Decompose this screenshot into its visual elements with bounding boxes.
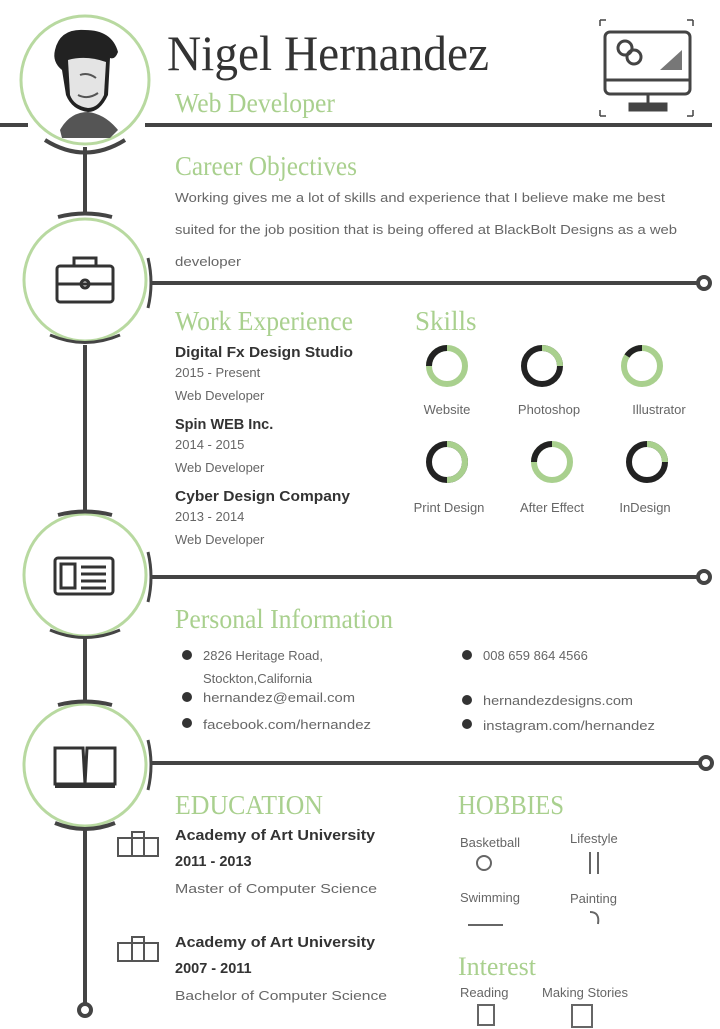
section: personal information: hernandezdesigns.com	[483, 693, 633, 708]
section: personal information: 008 659 864 4566	[483, 648, 588, 663]
section: skills: InDesign	[619, 500, 671, 515]
circle: briefcase	[24, 214, 151, 342]
section: career objectives: Career Objectives	[175, 151, 357, 181]
section: education: 2007 - 2011	[175, 961, 252, 977]
icon: id card	[55, 558, 113, 594]
section: hobbies	[458, 790, 628, 1027]
section: hobbies: Making Stories	[542, 985, 628, 1000]
section: skills	[414, 306, 686, 515]
section: education: Academy of Art University	[175, 828, 375, 844]
section: work experience: Web Developer	[175, 532, 265, 547]
section: personal information: hernandez@email.com	[203, 690, 355, 705]
section: skills: Illustrator	[632, 402, 686, 417]
section: work experience: Work Experience	[175, 306, 353, 336]
section: skills: After Effect	[520, 500, 584, 515]
section: personal information	[175, 604, 655, 733]
section: personal information: instagram.com/hernandez	[483, 718, 655, 733]
section: education: 2011 - 2013	[175, 854, 252, 870]
section: skills: Website	[424, 402, 470, 417]
icon: book	[55, 748, 115, 786]
section: career objectives: Working gives me a lot of skills and experience that I believe make me best	[175, 190, 665, 205]
section: hobbies: Swimming	[460, 890, 520, 905]
section: personal information: Personal Information	[175, 604, 393, 634]
section: hobbies: Lifestyle	[570, 831, 618, 846]
section: education: Academy of Art University	[175, 935, 375, 951]
portrait	[54, 30, 118, 138]
section: work experience: Cyber Design Company	[175, 489, 350, 505]
section: education: EDUCATION	[175, 790, 323, 820]
section: work experience: Web Developer	[175, 388, 265, 403]
circle: id card	[24, 512, 151, 638]
section: skills: Print Design	[414, 500, 484, 515]
section: hobbies: HOBBIES	[458, 790, 564, 820]
section: work experience: 2015 - Present	[175, 365, 261, 380]
section: personal information: facebook.com/hernandez	[203, 717, 371, 732]
circle: book	[24, 702, 151, 829]
section: career objectives	[175, 151, 677, 269]
section: work experience: 2013 - 2014	[175, 509, 244, 524]
section: personal information: 2826 Heritage Road,	[203, 648, 323, 663]
icon: school	[118, 832, 158, 961]
subtitle: Web Developer	[175, 88, 335, 118]
section: work experience: Web Developer	[175, 460, 265, 475]
section: education	[118, 790, 387, 1003]
section: work experience: Digital Fx Design Studio	[175, 345, 353, 361]
skill rings	[429, 348, 665, 480]
photo circle	[21, 16, 149, 152]
section: education: Bachelor of Computer Science	[175, 988, 387, 1003]
section: career objectives: developer	[175, 254, 242, 269]
section: career objectives: suited for the job position that is being offered at BlackBolt Designs as a web	[175, 222, 677, 237]
section: personal information: Stockton,California	[203, 671, 313, 686]
section: work experience: Spin WEB Inc.	[175, 417, 273, 433]
title: Nigel Hernandez	[167, 25, 489, 81]
section: hobbies: Basketball	[460, 835, 520, 850]
section: work experience	[175, 306, 353, 547]
section: skills: Skills	[415, 306, 477, 336]
icon: briefcase	[57, 258, 113, 302]
icon: monitor	[600, 20, 693, 116]
section: hobbies: Painting	[570, 891, 617, 906]
section: education: Master of Computer Science	[175, 881, 377, 896]
section: skills: Photoshop	[518, 402, 580, 417]
section: hobbies: Interest	[458, 952, 537, 981]
section: work experience: 2014 - 2015	[175, 437, 244, 452]
section: hobbies: Reading	[460, 985, 508, 1000]
